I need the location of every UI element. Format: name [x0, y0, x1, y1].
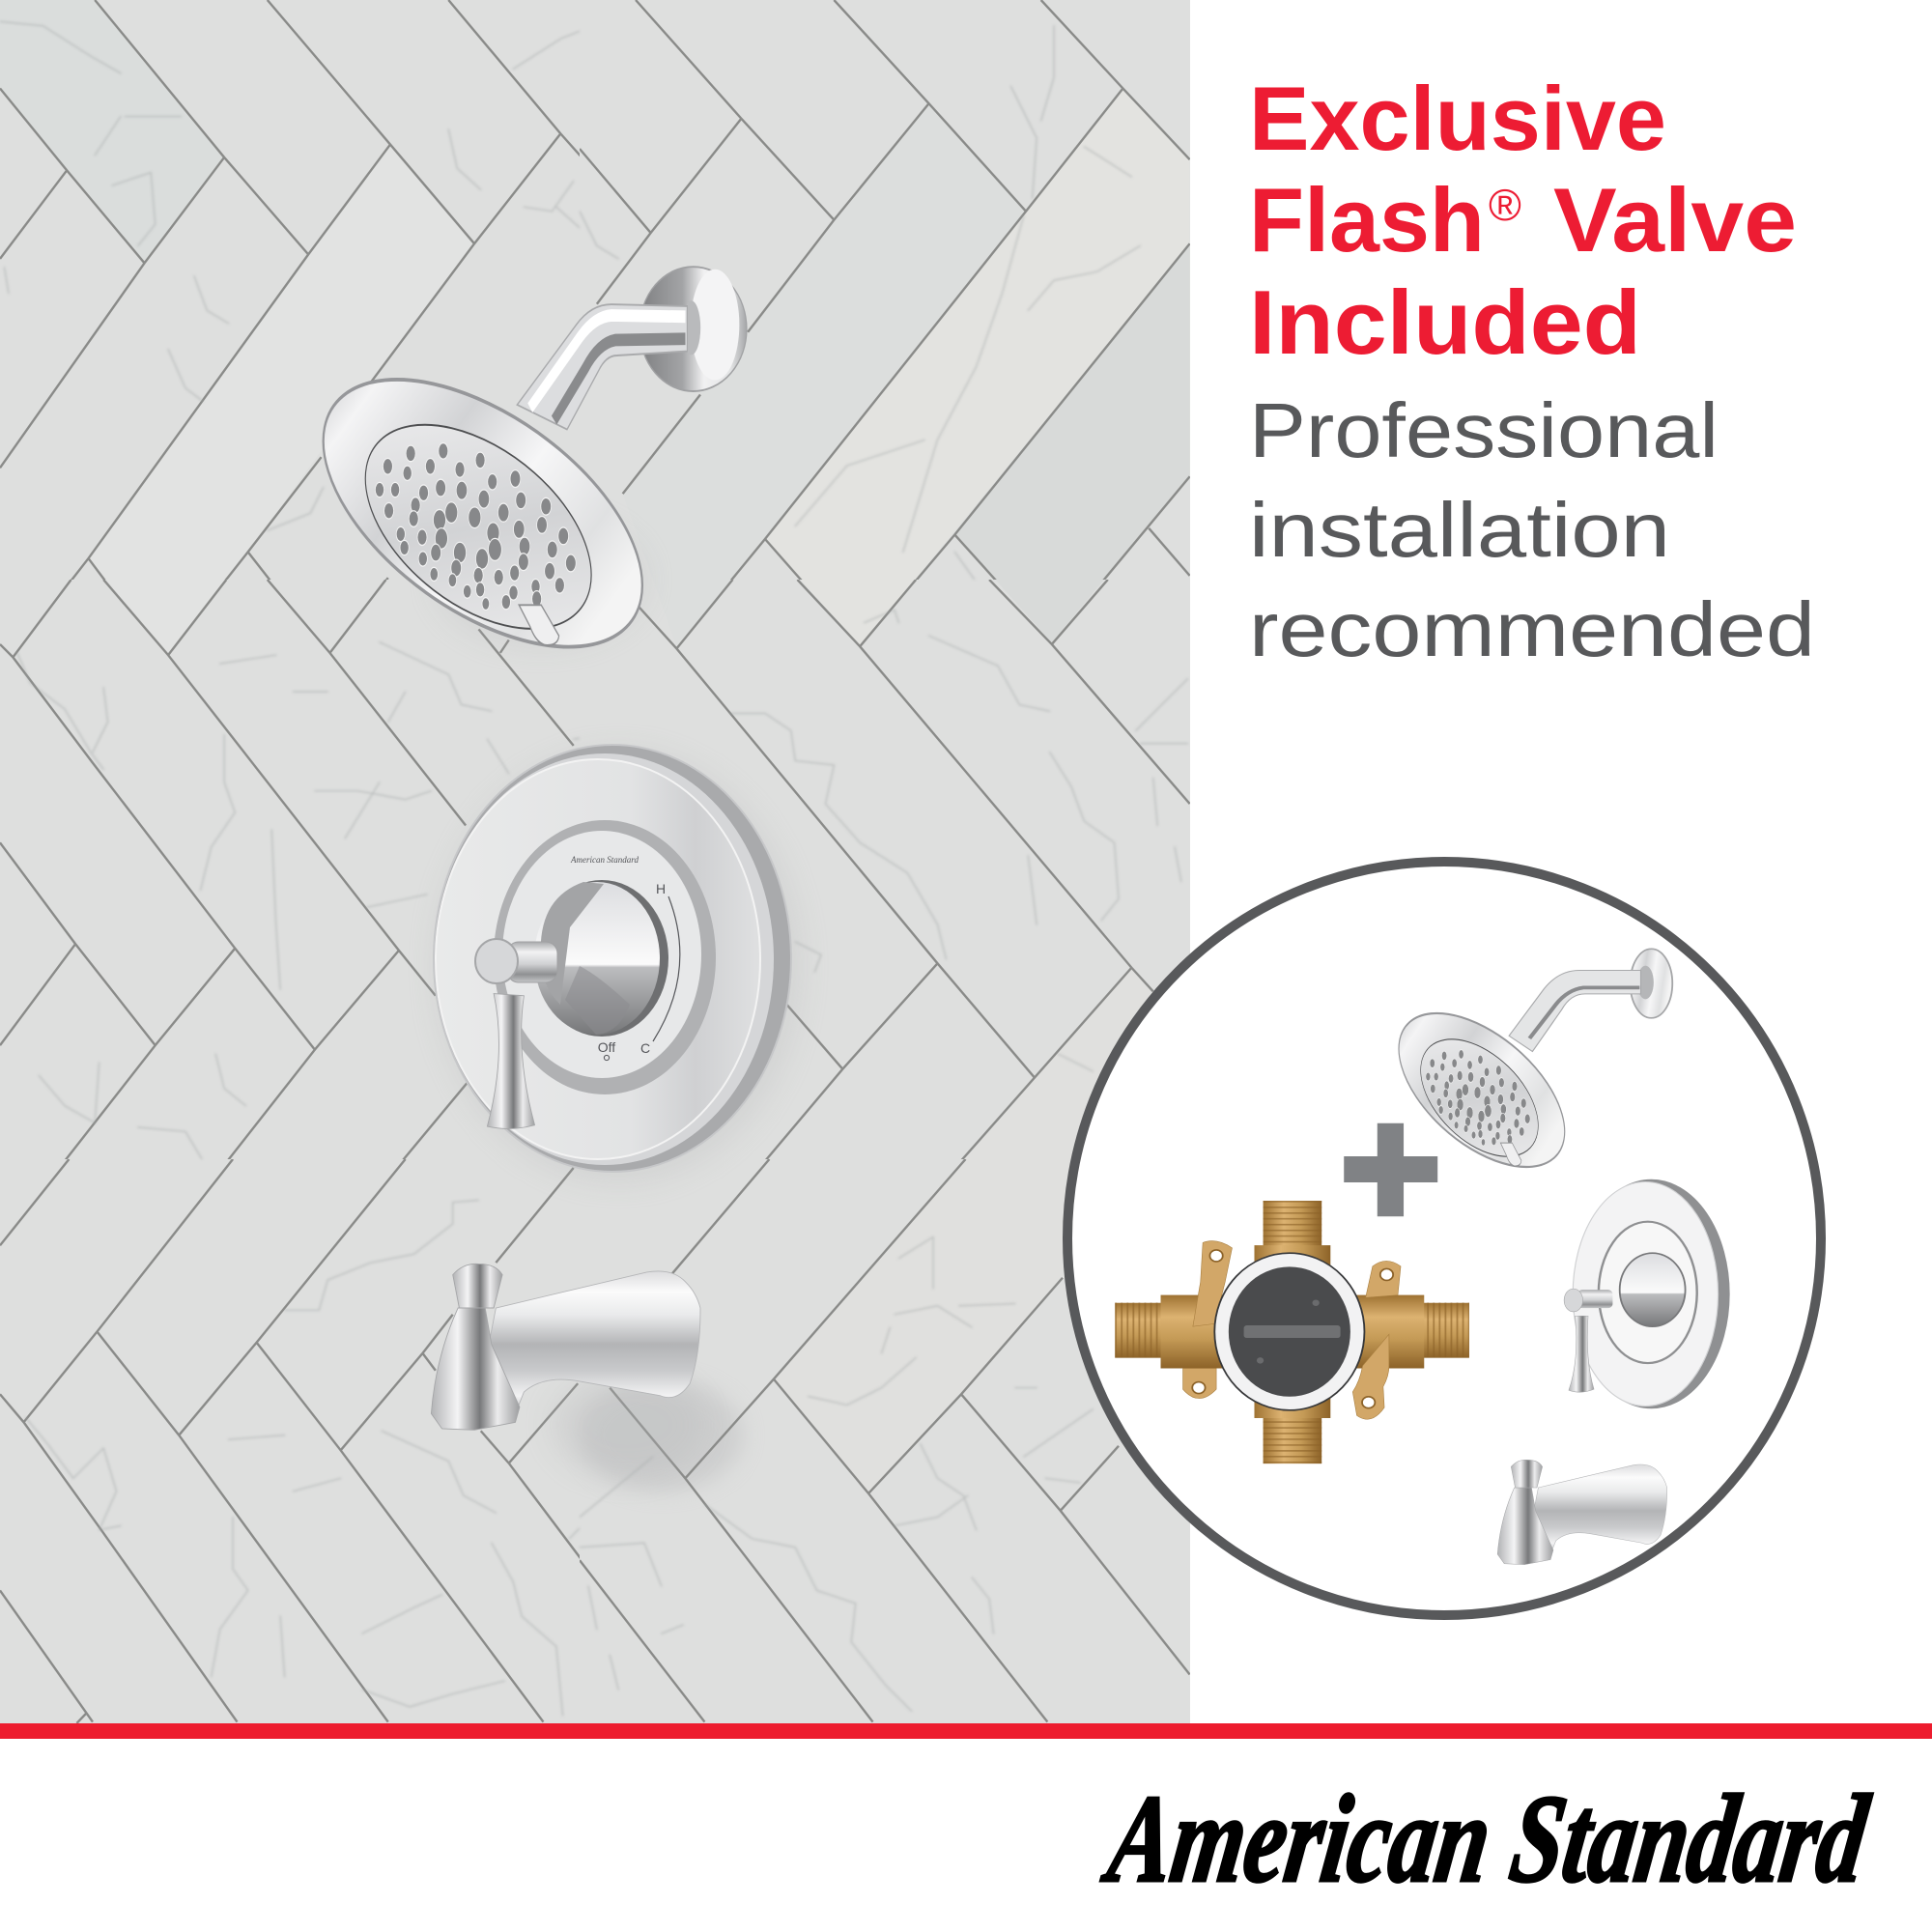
heading: Exclusive Flash Valve Included: Valve [1553, 169, 1797, 270]
handle cap [475, 939, 518, 983]
heading: Exclusive Flash Valve Included: Included [1249, 271, 1641, 373]
groove ring [494, 820, 716, 1094]
marble veins [0, 13, 1187, 1716]
outer stepped plate [434, 745, 791, 1172]
handle lever [487, 994, 535, 1128]
panel: marble herringbone tile wall [0, 0, 1190, 1723]
spout body [431, 1264, 700, 1430]
circle outline [1067, 862, 1821, 1615]
trim markings: C [640, 1040, 650, 1056]
handle stem [507, 942, 557, 982]
wall flange [639, 267, 747, 391]
tub spout on wall [431, 1264, 705, 1478]
trim markings: American Standard [570, 855, 639, 865]
tile grout lines [0, 0, 1190, 1723]
trim markings: H [656, 881, 666, 896]
shower valve trim plate on wall [434, 745, 802, 1182]
red divider band [0, 1723, 1932, 1739]
heading: Exclusive Flash Valve Included: Exclusive [1249, 68, 1666, 169]
sub-heading: Professional installation recommended: installation [1249, 487, 1670, 573]
sub-heading: Professional installation recommended: Professional [1249, 387, 1719, 473]
inset trim plate [1564, 1179, 1729, 1408]
inset shower arm [1509, 970, 1641, 1052]
trim markings [570, 855, 680, 1061]
plate shadow [435, 750, 802, 1182]
inset shower flange [1631, 949, 1672, 1018]
sub-heading: Professional installation recommended: recommended [1249, 586, 1815, 672]
plus sign [1344, 1123, 1437, 1216]
brass rough-in valve [1115, 1201, 1469, 1463]
shower head assembly on wall [304, 267, 747, 701]
heading: Exclusive Flash Valve Included [1249, 68, 1797, 373]
trim markings: Off [598, 1039, 615, 1055]
callout circle: what's included [1067, 862, 1821, 1615]
heading: Exclusive Flash Valve Included: ® [1489, 180, 1521, 230]
shower head disc [304, 325, 661, 701]
inset tub spout [1497, 1460, 1667, 1565]
dial cone [534, 880, 668, 1037]
sub-heading: Professional installation recommended [1249, 387, 1815, 672]
heading: Exclusive Flash Valve Included: Flash [1249, 169, 1485, 270]
shadow beneath shower head [435, 512, 647, 647]
spout shadow [551, 1372, 705, 1478]
inset shower head [1389, 981, 1575, 1199]
shower arm [517, 304, 687, 430]
